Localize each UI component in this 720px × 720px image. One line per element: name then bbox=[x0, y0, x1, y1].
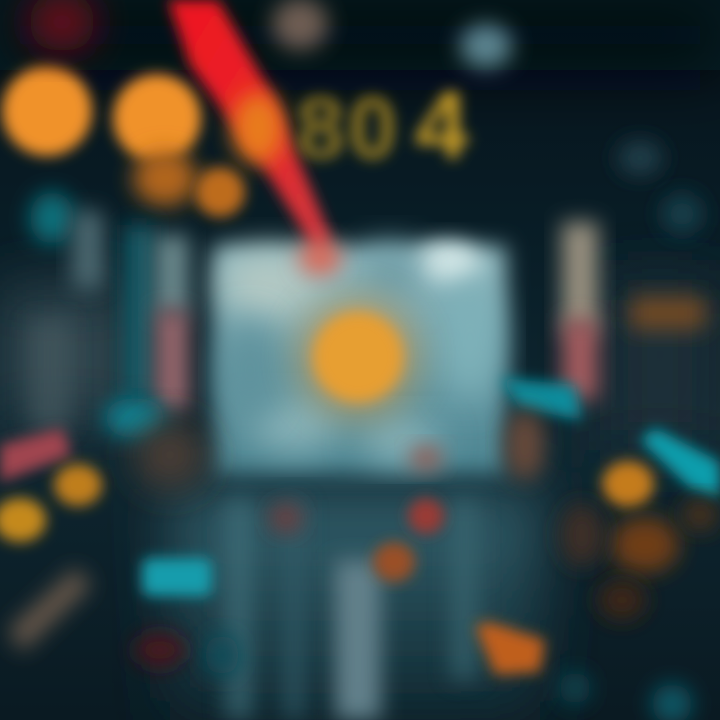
panel: central glowing board bbox=[214, 242, 506, 474]
floor streaks bbox=[30, 320, 478, 720]
heading: blurred yellow figures: 8 bbox=[296, 78, 345, 177]
heading: blurred yellow figures: 0 bbox=[348, 78, 397, 177]
right bars bbox=[500, 222, 706, 481]
floor elements bbox=[134, 446, 692, 720]
right cluster bbox=[560, 428, 720, 620]
icon: central orange circle bbox=[298, 297, 418, 417]
left bars bbox=[30, 192, 206, 489]
icon: orange circles top left bbox=[2, 0, 245, 217]
heading: blurred yellow figures bbox=[296, 72, 468, 179]
left cluster bbox=[0, 428, 102, 652]
heading: blurred yellow figures: 4 bbox=[415, 72, 468, 179]
arrow: red streak bbox=[168, 0, 342, 276]
icon: pale dots at top bbox=[272, 0, 702, 234]
